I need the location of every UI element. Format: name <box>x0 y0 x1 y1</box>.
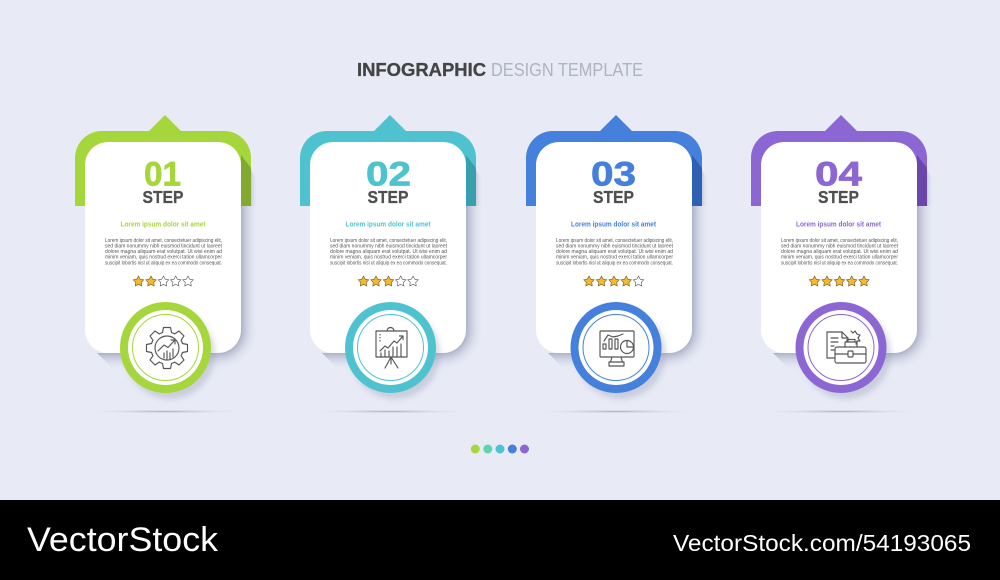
rating stars: 2 of 5 <box>133 276 193 286</box>
body text: suscipit lobortis nisl ut aliquip ex ea commodo consequat. <box>556 260 673 266</box>
purple header tab <box>751 115 927 206</box>
step label: STEP <box>368 187 409 207</box>
body text: dolore magna aliquam erat volutpat. Ut wisi enim ad <box>105 249 222 255</box>
icon circle: presentation board <box>345 302 436 393</box>
body text: Lorem ipsum dolor sit amet, consectetuer adipiscing elit, <box>330 238 447 244</box>
floor shadow: step 02 <box>305 410 475 414</box>
body text: sed diam nonummy nibh euismod tincidunt ut laoreet <box>781 243 899 249</box>
body text: suscipit lobortis nisl ut aliquip ex ea commodo consequat. <box>330 260 447 266</box>
icon circle: monitor with charts <box>570 302 662 393</box>
footer logo: VectorStock <box>27 521 219 559</box>
rating stars: 5 of 5 <box>809 276 869 286</box>
panel: step 04 <box>751 115 935 399</box>
body text: Lorem ipsum dolor sit amet, consectetuer adipiscing elit, <box>105 238 222 244</box>
title: DESIGN TEMPLATE <box>491 60 643 80</box>
rating stars: 3 of 5 <box>358 276 418 286</box>
step label: STEP <box>818 187 859 207</box>
body text: suscipit lobortis nisl ut aliquip ex ea commodo consequat. <box>781 260 898 266</box>
subtitle: Lorem ipsum dolor sit amet <box>346 222 431 228</box>
footer bar <box>0 500 1000 580</box>
panel: step 03 <box>526 115 710 399</box>
body text: Lorem ipsum dolor sit amet, consectetuer adipiscing elit, <box>556 238 673 244</box>
step label: STEP <box>142 187 184 207</box>
body text: sed diam nonummy nibh euismod tincidunt ut laoreet <box>556 243 674 249</box>
body text: dolore magna aliquam erat volutpat. Ut wisi enim ad <box>556 249 673 255</box>
title <box>357 60 643 80</box>
number 03: 03 <box>591 156 636 194</box>
rating stars: 4 of 5 <box>584 276 644 286</box>
body text <box>781 238 899 266</box>
icon circle: document and briefcase <box>796 302 886 393</box>
body text <box>330 238 448 266</box>
footer url: VectorStock.com/54193065 <box>673 530 971 556</box>
body text: minim veniam, quis nostrud exerci tation ullamcorper <box>330 255 447 261</box>
body text: suscipit lobortis nisl ut aliquip ex ea commodo consequat. <box>105 260 222 266</box>
body text: minim veniam, quis nostrud exerci tation ullamcorper <box>781 255 898 261</box>
teal header tab <box>300 115 476 206</box>
panel: step 01 <box>75 115 259 399</box>
subtitle: Lorem ipsum dolor sit amet <box>120 222 206 228</box>
floor shadow: step 04 <box>756 410 926 414</box>
body text <box>105 238 223 266</box>
body text: dolore magna aliquam erat volutpat. Ut wisi enim ad <box>330 249 447 255</box>
subtitle: Lorem ipsum dolor sit amet <box>571 222 657 228</box>
floor shadow: step 01 <box>80 410 250 414</box>
body text: sed diam nonummy nibh euismod tincidunt ut laoreet <box>330 243 448 249</box>
body text: sed diam nonummy nibh euismod tincidunt ut laoreet <box>105 243 223 249</box>
subtitle: Lorem ipsum dolor sit amet <box>796 222 882 228</box>
body text: dolore magna aliquam erat volutpat. Ut wisi enim ad <box>781 249 898 255</box>
body text: minim veniam, quis nostrud exerci tation ullamcorper <box>105 255 222 261</box>
number 02: 02 <box>366 156 411 194</box>
icon circle: gear with growth chart <box>120 302 211 393</box>
pagination dots <box>471 444 529 454</box>
step label: STEP <box>593 187 634 207</box>
floor shadow: step 03 <box>531 410 701 414</box>
body text <box>556 238 674 266</box>
body text: Lorem ipsum dolor sit amet, consectetuer adipiscing elit, <box>781 238 898 244</box>
green header tab <box>75 115 251 206</box>
number 04: 04 <box>815 156 862 194</box>
title: INFOGRAPHIC <box>357 60 486 80</box>
body text: minim veniam, quis nostrud exerci tation ullamcorper <box>556 255 673 261</box>
blue header tab <box>526 115 702 206</box>
number 01: 01 <box>144 156 181 194</box>
panel: step 02 <box>300 115 484 399</box>
